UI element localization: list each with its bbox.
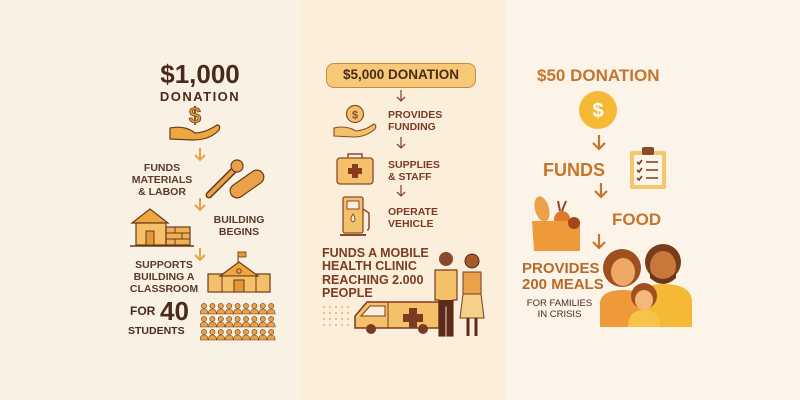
- icon: grocery bag: [532, 196, 580, 251]
- text: supports building a classroom: CLASSROOM: [130, 282, 198, 294]
- arrow: [396, 90, 406, 102]
- text: provides funding: PROVIDES: [388, 109, 442, 121]
- text: building begins: BEGINS: [219, 226, 259, 238]
- heading: donation: DONATION: [160, 89, 240, 104]
- icon: medical kit: [336, 153, 374, 185]
- text: mobile clinic: FUNDS A MOBILE: [322, 246, 429, 260]
- text: operate vehicle: VEHICLE: [388, 218, 434, 230]
- icon: house under construction: [130, 208, 194, 247]
- text: mobile clinic: HEALTH CLINIC: [322, 259, 417, 273]
- text: operate vehicle: [388, 206, 438, 230]
- text: for 40 students: [128, 296, 189, 337]
- arrow: [592, 135, 606, 150]
- text: provides 200 meals: PROVIDES: [522, 260, 600, 277]
- text: supplies & staff: & STAFF: [388, 171, 432, 183]
- text: funds: FUNDS: [543, 160, 605, 180]
- arrow: [194, 148, 206, 162]
- text: for 40 students: STUDENTS: [128, 325, 185, 337]
- icon: fuel pump: [340, 196, 370, 236]
- text: for families in crisis: IN CRISIS: [538, 309, 581, 320]
- icon: two people: [434, 252, 485, 337]
- icon: clipboard: [630, 147, 666, 189]
- icon: wrench and log: [206, 159, 264, 198]
- text: mobile clinic: [322, 246, 429, 300]
- heading pill: [326, 63, 476, 88]
- text: supplies & staff: SUPPLIES: [388, 159, 440, 171]
- arrow: [592, 234, 606, 250]
- arrow: [396, 137, 406, 149]
- icon: hand with coin: [333, 104, 376, 138]
- icon: hand with dollar: [169, 103, 220, 141]
- heading: $50 DONATION: [537, 66, 660, 85]
- text: provides 200 meals: [522, 260, 604, 293]
- text: mobile clinic: REACHING 2.000: [322, 272, 423, 286]
- icon: crowd of students: [200, 303, 276, 340]
- heading pill: $5,000 DONATION: [343, 67, 459, 82]
- text: for 40 students: 40: [160, 296, 189, 326]
- arrow: [396, 185, 406, 197]
- text: funds materials & labor: FUNDS: [144, 162, 180, 174]
- decorative dots: [323, 306, 349, 326]
- arrow: [194, 198, 206, 212]
- text: for families in crisis: FOR FAMILIES: [527, 298, 592, 309]
- icon: hand with dollar: $: [189, 103, 201, 128]
- icon: hand with coin: $: [352, 110, 358, 122]
- text: provides funding: [388, 109, 442, 133]
- icon: ambulance van: [354, 301, 438, 334]
- text: for families in crisis: [527, 298, 592, 320]
- text: funds materials & labor: & LABOR: [138, 186, 186, 198]
- text: for 40 students: FOR: [130, 304, 155, 318]
- text: food: FOOD: [612, 210, 661, 229]
- text: provides funding: FUNDING: [388, 121, 436, 133]
- text: funds materials & labor: MATERIALS: [132, 174, 192, 186]
- text: building begins: BUILDING: [214, 214, 264, 226]
- panel: $1,000 donation: [128, 59, 276, 340]
- icon: family: [600, 244, 692, 327]
- text: mobile clinic: PEOPLE: [322, 286, 373, 300]
- icon: coin: [579, 91, 617, 129]
- text: supports building a classroom: BUILDING A: [134, 271, 194, 283]
- text: building begins: [214, 214, 264, 238]
- heading: $1,000: $1,000: [160, 59, 240, 89]
- panel: $50 donation: [522, 66, 692, 327]
- arrow: [594, 183, 608, 198]
- text: operate vehicle: OPERATE: [388, 206, 438, 218]
- icon: school: [207, 252, 271, 293]
- arrow: [194, 248, 206, 262]
- text: supports building a classroom: SUPPORTS: [135, 259, 193, 271]
- text: funds materials & labor: [132, 162, 192, 198]
- icon: coin: $: [592, 100, 604, 122]
- text: supplies & staff: [388, 159, 440, 183]
- panel: $5,000 donation: [322, 63, 485, 337]
- text: provides 200 meals: 200 MEALS: [522, 276, 604, 293]
- text: supports building a classroom: [130, 259, 198, 294]
